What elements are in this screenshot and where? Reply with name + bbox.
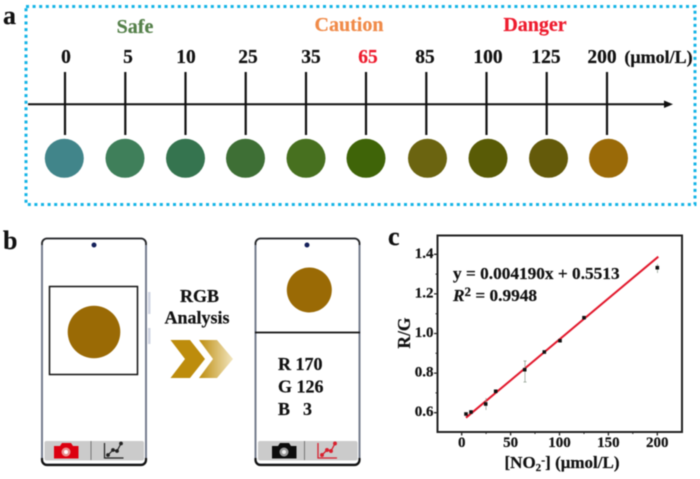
x axis tick labels: 200 (646, 435, 669, 451)
y axis title: R/G (394, 317, 414, 349)
concentration labels: 10 (176, 47, 196, 68)
y axis tick labels: 1.4 (415, 246, 434, 262)
data points with error bars (464, 264, 659, 416)
label b: b (3, 226, 17, 255)
x axis tick labels (458, 435, 669, 451)
x axis tick labels: 150 (597, 435, 620, 451)
regression equation: y = 0.004190x + 0.5513 (453, 264, 620, 283)
concentration labels: 35 (301, 47, 321, 68)
arrow: double chevron (170, 340, 233, 378)
concentration labels (61, 47, 693, 68)
toolbar (44, 441, 144, 460)
x axis title: 2 (536, 462, 542, 474)
regression equation (452, 264, 620, 305)
panel a: colour scale (3, 1, 695, 204)
x axis title: - (541, 453, 545, 467)
timeline axis arrow (28, 72, 673, 135)
concentration labels: 100 (473, 47, 503, 68)
x axis title: ] (μmol/L) (545, 453, 620, 472)
y axis tick labels (415, 246, 434, 420)
concentration labels: (μmol/L) (624, 47, 693, 68)
y axis tick labels: 1.0 (415, 325, 434, 341)
label c: c (388, 222, 400, 251)
y axis tick labels: 0.8 (415, 364, 434, 380)
concentration labels: 85 (415, 47, 435, 68)
toolbar (258, 441, 358, 460)
regression equation: = 0.9948 (471, 286, 537, 305)
label a: a (3, 1, 16, 30)
fit line (466, 257, 658, 418)
concentration labels: 125 (531, 47, 561, 68)
risk heading: safe: Safe (117, 16, 153, 38)
RGB values: B (278, 399, 290, 419)
regression equation: R (452, 286, 465, 305)
concentration labels: 200 (587, 47, 617, 68)
RGB values: G 126 (278, 376, 324, 396)
risk heading: caution: Caution (315, 14, 383, 36)
phone 2: result screen (255, 238, 360, 465)
plot frame and axes (434, 236, 682, 436)
RGB values: 3 (303, 399, 312, 419)
panel b: smartphone RGB analysis (3, 226, 360, 465)
RGB values (278, 354, 324, 419)
icon: black chart (104, 442, 124, 458)
y axis tick labels: 0.6 (415, 404, 434, 420)
icon: black camera (272, 443, 296, 458)
phone 1: capture screen (42, 238, 150, 465)
RGB analysis caption: RGB (180, 286, 219, 306)
RGB values: R 170 (278, 354, 322, 374)
regression equation: 2 (465, 284, 471, 299)
capture frame with sample (50, 286, 138, 374)
colour swatches (45, 139, 628, 178)
icon: red chart (318, 442, 337, 458)
RGB analysis caption (164, 286, 230, 328)
icon: red camera (54, 443, 78, 458)
concentration labels: 25 (238, 47, 258, 68)
RGB analysis caption: Analysis (164, 308, 230, 328)
x axis tick labels: 0 (458, 435, 465, 451)
x axis title: [NO (504, 453, 536, 472)
x axis tick labels: 50 (503, 435, 518, 451)
y axis tick labels: 1.2 (415, 286, 434, 302)
x axis tick labels: 100 (548, 435, 571, 451)
concentration labels: 5 (123, 47, 133, 68)
risk heading: danger: Danger (503, 14, 567, 36)
sample swatch (287, 268, 332, 312)
concentration labels: 65 (358, 47, 378, 68)
panel c: calibration chart (388, 222, 682, 474)
concentration labels: 0 (61, 47, 71, 68)
